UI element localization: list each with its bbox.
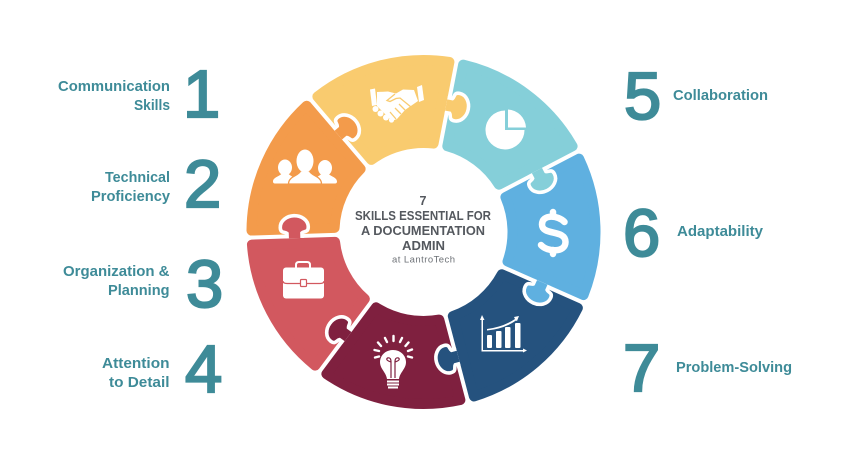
icon: people	[273, 150, 337, 184]
icon: handshake	[370, 85, 424, 123]
number 6: 6	[623, 196, 660, 271]
number 3: 3	[186, 247, 223, 322]
piece: teal	[418, 53, 581, 206]
piece: navy	[425, 251, 587, 407]
number 1: 1	[183, 57, 220, 132]
center title: A DOCUMENTATION	[361, 224, 485, 238]
knob: yellow	[443, 91, 471, 123]
piece: blue	[504, 158, 598, 298]
knob: maroon	[322, 312, 356, 348]
skill 1 label	[58, 78, 170, 114]
icon: pie chart	[486, 110, 526, 150]
number 4: 4	[185, 332, 222, 407]
icon: light bulb	[374, 336, 412, 388]
skill 7 label: Problem-Solving	[676, 359, 792, 376]
icon: dollar sign	[541, 212, 566, 254]
piece: yellow	[314, 48, 468, 169]
knob: navy	[433, 343, 462, 376]
knob: red	[280, 215, 309, 239]
center title: at LantroTech	[392, 254, 455, 266]
piece: maroon	[324, 300, 475, 414]
skill 4 label: Attention	[102, 355, 170, 372]
skill 5 label: Collaboration	[673, 87, 768, 104]
skill 2 label	[91, 169, 171, 205]
knob: orange	[329, 110, 365, 146]
skill 1 label: Communication	[58, 78, 170, 95]
center title	[355, 194, 491, 266]
skill 2 label: Proficiency	[91, 188, 171, 205]
icon: briefcase	[283, 262, 324, 298]
skill 3 label: Planning	[108, 282, 170, 299]
center title: ADMIN	[402, 239, 445, 253]
center title: 7	[420, 194, 427, 208]
number 2: 2	[184, 147, 221, 222]
piece: red	[239, 210, 382, 372]
skill 2 label: Technical	[105, 169, 170, 186]
center title: SKILLS ESSENTIAL FOR	[355, 209, 491, 223]
knob: teal	[525, 164, 560, 197]
number 5: 5	[624, 59, 661, 134]
skill 4 label: to Detail	[109, 374, 170, 391]
skill 1 label: Skills	[134, 97, 170, 114]
piece: orange	[239, 100, 375, 261]
skill 3 label	[63, 263, 170, 299]
skill 4 label	[102, 355, 170, 391]
skill 6 label: Adaptability	[677, 223, 764, 240]
puzzle ring	[239, 48, 598, 414]
number 7: 7	[623, 331, 660, 406]
knob: blue	[520, 277, 555, 309]
icon: growth chart	[480, 315, 527, 352]
skill 3 label: Organization &	[63, 263, 170, 280]
